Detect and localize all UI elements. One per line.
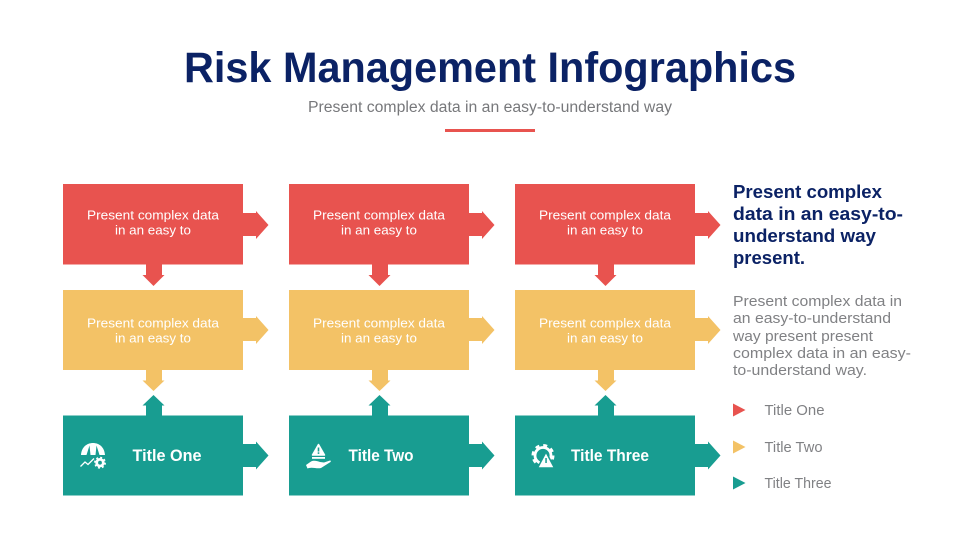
heading: side panel: Present complex [733,181,883,202]
panel: column two [289,184,494,496]
title underline [445,129,535,132]
label: Title Two: Title Two [348,447,414,465]
yellow box with arrows: Present complex data [87,316,220,330]
red box with arrows: in an easy to [341,222,417,238]
teal box with arrows [63,395,268,496]
icon: gear with warning sign [533,445,554,468]
text block: side panel body: Present complex data in [733,293,902,310]
heading: side panel [733,181,903,268]
yellow box with arrows: in an easy to [341,330,417,346]
text block: side panel body: to-understand way. [733,362,867,379]
teal box with arrows [515,395,720,496]
heading: side panel: data in an easy-to- [733,203,903,224]
legend item: Title Two: Title Two [764,439,822,456]
yellow box with arrows: in an easy to [567,330,643,346]
yellow box with arrows: Present complex data [539,316,672,330]
red box with arrows [289,184,494,286]
label: Title Three: Title Three [571,447,649,465]
text block: side panel body: complex data in an easy- [733,345,911,362]
red box with arrows: Present complex data [539,208,672,222]
label: Title One: Title One [132,447,202,465]
yellow box with arrows [63,290,268,391]
legend item: Title Three: Title Three [764,475,832,492]
subtitle: Present complex data in an easy-to-understand way [308,99,672,116]
text block: side panel body [732,293,911,379]
teal box with arrows [289,395,494,496]
red box with arrows: in an easy to [115,222,191,238]
text block: side panel body: an easy-to-understand [733,310,891,327]
icon: umbrella with chart and gear [80,443,105,468]
legend [733,402,832,492]
yellow box with arrows: Present complex data [313,316,446,330]
yellow box with arrows [289,290,494,391]
text block: side panel body: way present present [732,328,874,345]
heading: side panel: present. [733,247,805,268]
panel: column three [515,184,720,496]
yellow box with arrows: in an easy to [115,330,191,346]
red box with arrows [515,184,720,286]
panel: column one [63,184,268,496]
red box with arrows [63,184,268,286]
heading: side panel: understand way [733,225,877,246]
legend item: Title One: Title One [764,402,824,419]
icon: hand holding warning sign [306,444,331,468]
red box with arrows: Present complex data [87,208,220,222]
yellow box with arrows [515,290,720,391]
red box with arrows: Present complex data [313,208,446,222]
title: Risk Management Infographics [184,44,796,92]
red box with arrows: in an easy to [567,222,643,238]
